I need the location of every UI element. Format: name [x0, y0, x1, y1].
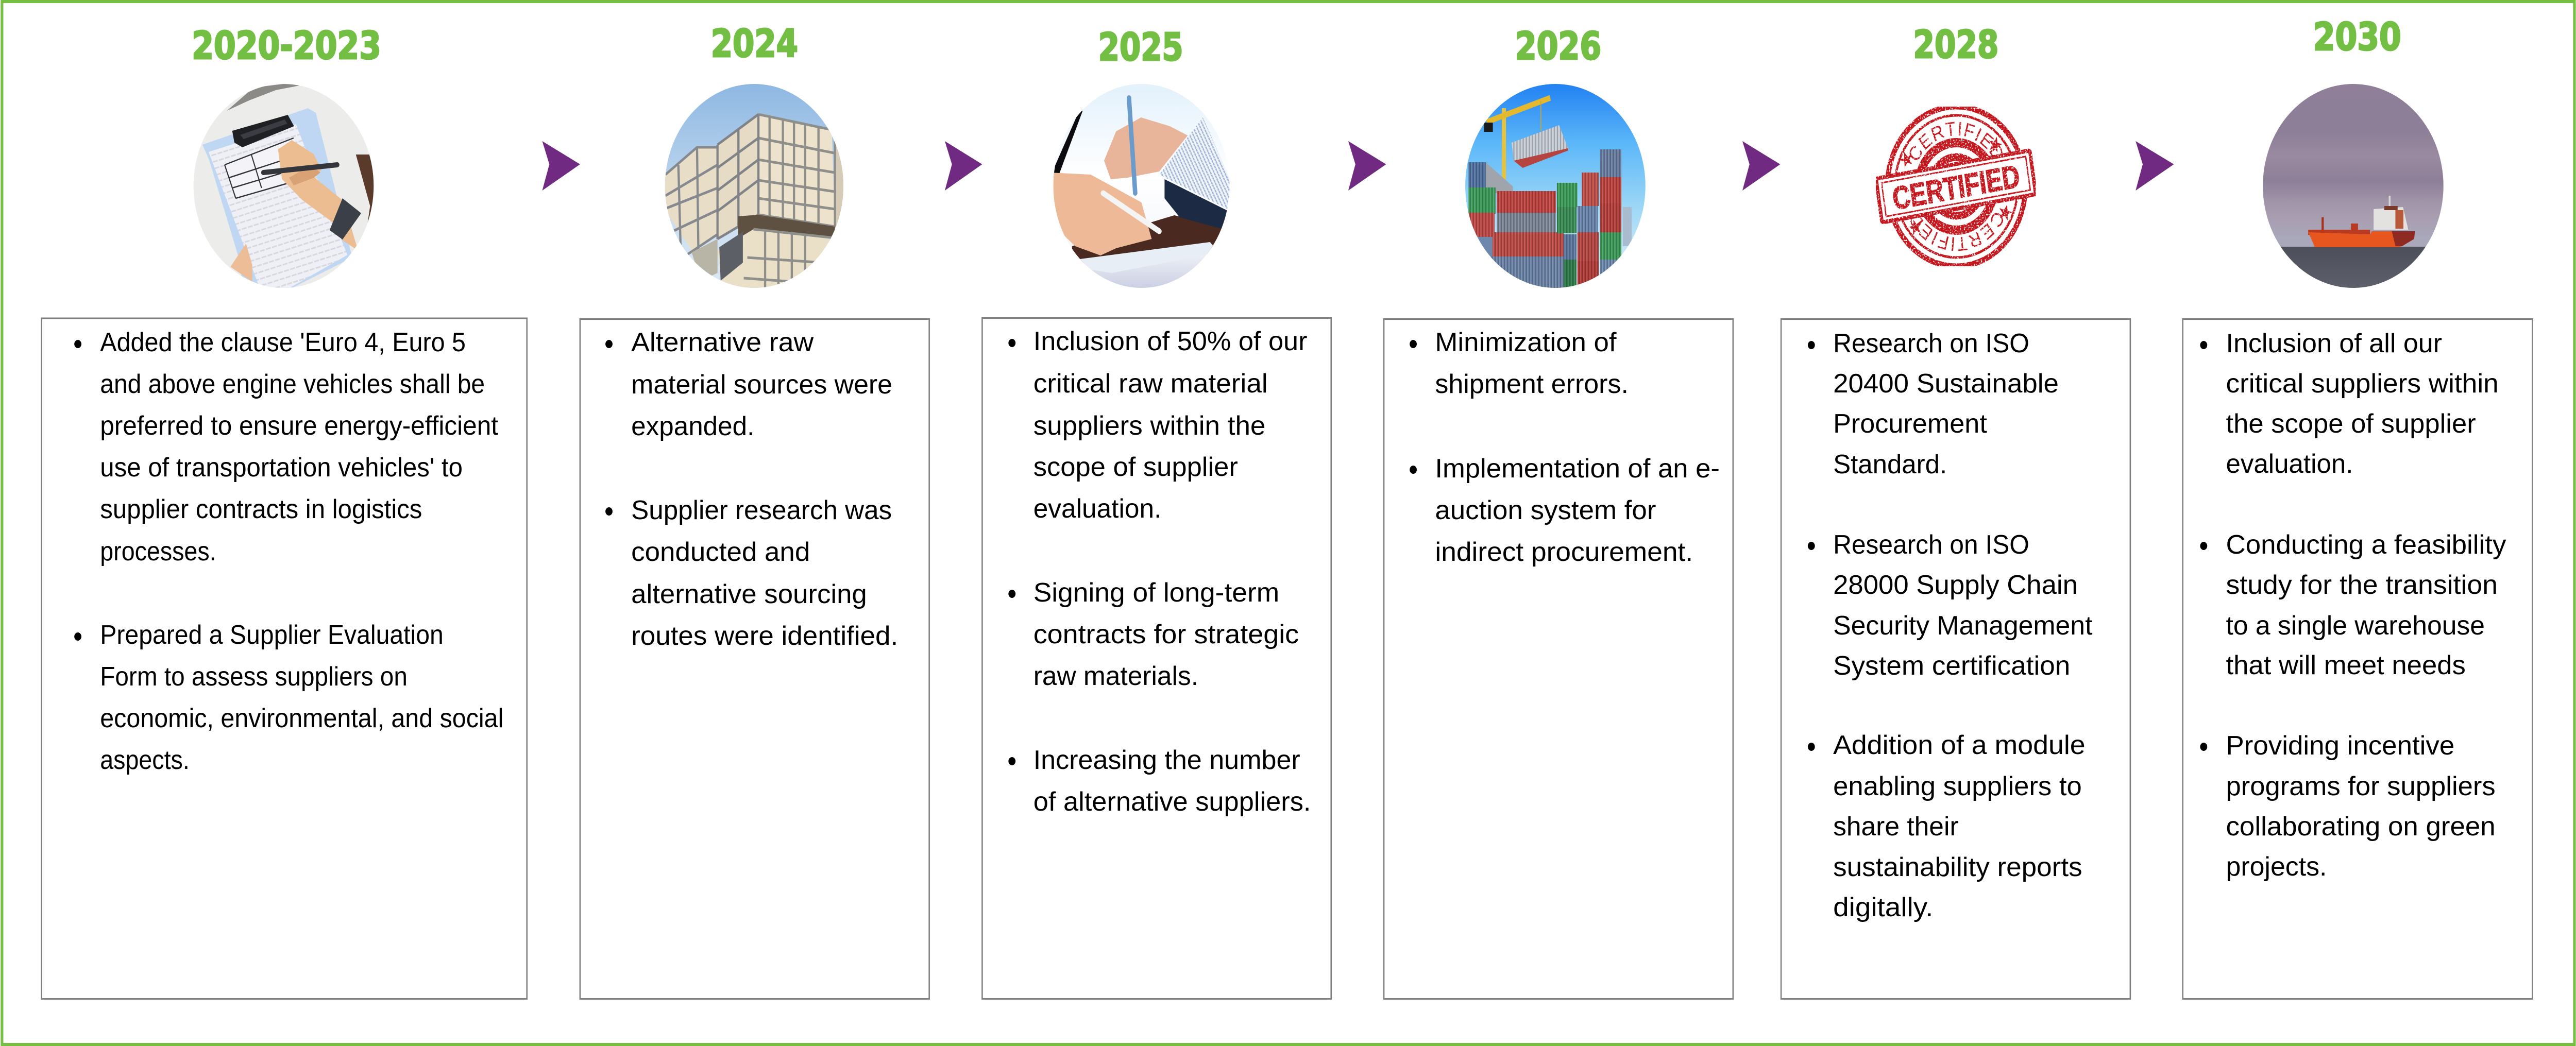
- bullet: evaluation form: [74, 620, 503, 775]
- bullet: all critical suppliers: the scope of supplier: [2226, 409, 2476, 439]
- bullet: supplier research: conducted and: [631, 537, 810, 567]
- year heading 2030: 2030: [2313, 15, 2401, 59]
- bullet: e-auction: indirect procurement.: [1435, 537, 1693, 567]
- bullet: alternative suppliers: Increasing the number: [1033, 745, 1300, 775]
- bullet: supplier research: [605, 495, 898, 651]
- panel: 2020-2023 actions: [42, 318, 527, 999]
- bullet: ISO 20400: 20400 Sustainable: [1833, 369, 2059, 399]
- bullet: evaluation form: Form to assess suppliers on: [100, 662, 408, 692]
- arrow: [2136, 141, 2174, 191]
- bullet: euro clause: preferred to ensure energy-efficient: [100, 411, 499, 441]
- bullet: sustainability module: enabling suppliers to: [1833, 771, 2082, 801]
- bullet: sustainability module: share their: [1833, 812, 1959, 842]
- bullet: euro clause: Added the clause 'Euro 4, Euro 5: [100, 328, 466, 357]
- year heading 2024: 2024: [711, 22, 798, 66]
- arrow: [945, 141, 982, 191]
- bullet: sustainability module: [1808, 730, 2086, 922]
- bullet: ISO 20400: Procurement: [1833, 409, 1987, 439]
- bullet: shipment errors: Minimization of: [1435, 328, 1617, 357]
- icon: red certified stamp: CERTIFIED: [1909, 122, 2003, 160]
- bullet: raw material sources: [605, 328, 892, 441]
- bullet: evaluation form: aspects.: [100, 745, 190, 775]
- column: 2030: [2183, 15, 2532, 999]
- bullet: sustainability module: digitally.: [1833, 893, 1933, 922]
- bullet: euro clause: [74, 328, 499, 567]
- bullet: ISO 28000: Security Management: [1833, 611, 2093, 641]
- panel: 2030 actions: [2183, 319, 2532, 999]
- bullet: euro clause: and above engine vehicles shall be: [100, 369, 485, 399]
- panel: 2025 actions: [982, 318, 1331, 999]
- icon: red certified stamp: CERTIFIED: [1890, 159, 2022, 217]
- bullet: long-term contracts: contracts for strategic: [1033, 620, 1299, 649]
- bullet: 50 percent suppliers: [1008, 327, 1308, 524]
- bullet: all critical suppliers: evaluation.: [2226, 449, 2353, 479]
- column: 2024: [580, 22, 982, 999]
- bullet: 50 percent suppliers: suppliers within the: [1033, 411, 1265, 441]
- bullet: 50 percent suppliers: evaluation.: [1033, 494, 1161, 524]
- bullet: sustainability module: sustainability reports: [1833, 852, 2082, 882]
- bullet: long-term contracts: [1008, 578, 1299, 691]
- arrow: [1742, 141, 1780, 191]
- photo: orange tanker at sea: [2260, 82, 2447, 290]
- bullet: supplier research: routes were identified.: [631, 621, 898, 651]
- year heading 2028: 2028: [1913, 23, 1998, 67]
- bullet: 50 percent suppliers: critical raw material: [1033, 369, 1268, 399]
- bullet: supplier research: Supplier research was: [631, 495, 892, 525]
- bullet: all critical suppliers: Inclusion of all our: [2226, 329, 2442, 358]
- column: 2028: [1781, 23, 2174, 1000]
- bullet: ISO 20400: [1808, 329, 2059, 479]
- year heading 2026: 2026: [1515, 25, 1601, 68]
- bullet: incentive programs: [2200, 731, 2496, 882]
- year heading 2020-2023: 2020-2023: [192, 24, 381, 68]
- bullet: e-auction: auction system for: [1435, 495, 1656, 525]
- bullet: single warehouse study: to a single warehouse: [2226, 611, 2485, 641]
- bullet: supplier research: alternative sourcing: [631, 579, 867, 609]
- bullet: alternative suppliers: [1008, 745, 1311, 817]
- bullet: ISO 28000: 28000 Supply Chain: [1833, 570, 2078, 600]
- bullet: single warehouse study: that will meet needs: [2226, 650, 2466, 680]
- bullet: raw material sources: expanded.: [631, 411, 754, 441]
- bullet: 50 percent suppliers: scope of supplier: [1033, 452, 1238, 482]
- bullet: euro clause: processes.: [100, 537, 216, 567]
- bullet: incentive programs: collaborating on green: [2226, 812, 2496, 842]
- icon: red certified stamp: CERTIFIED: [1910, 213, 2003, 251]
- bullet: all critical suppliers: critical suppliers within: [2226, 369, 2499, 399]
- column: 2020-2023: [42, 24, 580, 999]
- bullet: e-auction: Implementation of an e-: [1435, 454, 1720, 484]
- bullet: incentive programs: projects.: [2226, 852, 2327, 882]
- photo: shipping containers and crane: [1464, 82, 1648, 289]
- bullet: incentive programs: Providing incentive: [2226, 731, 2454, 761]
- arrow: [542, 141, 580, 191]
- bullet: single warehouse study: study for the transition: [2226, 570, 2498, 600]
- bullet: raw material sources: material sources were: [631, 370, 892, 400]
- bullet: 50 percent suppliers: Inclusion of 50% of our: [1033, 327, 1308, 356]
- column: 2025: [982, 26, 1386, 999]
- bullet: sustainability module: Addition of a module: [1833, 730, 2086, 760]
- bullet: long-term contracts: Signing of long-term: [1033, 578, 1279, 608]
- bullet: euro clause: use of transportation vehicles' to: [100, 453, 463, 483]
- photo: contract signing hands: [1050, 82, 1232, 289]
- bullet: all critical suppliers: [2200, 329, 2499, 479]
- bullet: e-auction: [1410, 454, 1720, 567]
- bullet: ISO 20400: Research on ISO: [1833, 329, 2029, 358]
- bullet: single warehouse study: Conducting a feasibility: [2226, 530, 2506, 560]
- bullet: incentive programs: programs for suppliers: [2226, 771, 2496, 801]
- bullet: shipment errors: [1410, 328, 1629, 399]
- icon: red certified stamp: [1876, 107, 2036, 266]
- bullet: alternative suppliers: of alternative suppliers.: [1033, 787, 1311, 817]
- bullet: euro clause: supplier contracts in logistics: [100, 494, 422, 524]
- bullet: long-term contracts: raw materials.: [1033, 661, 1198, 691]
- bullet: evaluation form: economic, environmental, and social: [100, 704, 503, 733]
- panel: 2024 actions: [580, 319, 929, 999]
- bullet: ISO 28000: System certification: [1833, 651, 2070, 681]
- year heading 2025: 2025: [1098, 26, 1183, 70]
- bullet: ISO 20400: Standard.: [1833, 450, 1947, 479]
- photo: hand filling a form on a clipboard: [191, 82, 376, 289]
- column: 2026: [1384, 25, 1780, 999]
- photo: stacked IBC tanks: [663, 82, 845, 289]
- arrow: [1348, 141, 1386, 191]
- bullet: evaluation form: Prepared a Supplier Evaluation: [100, 620, 444, 650]
- bullet: single warehouse study: [2200, 530, 2506, 680]
- bullet: shipment errors: shipment errors.: [1435, 369, 1629, 399]
- panel: 2026 actions: [1384, 319, 1733, 999]
- bullet: ISO 28000: [1808, 530, 2093, 681]
- bullet: raw material sources: Alternative raw: [631, 328, 814, 357]
- panel: 2028 actions: [1781, 319, 2130, 999]
- bullet: ISO 28000: Research on ISO: [1833, 530, 2029, 560]
